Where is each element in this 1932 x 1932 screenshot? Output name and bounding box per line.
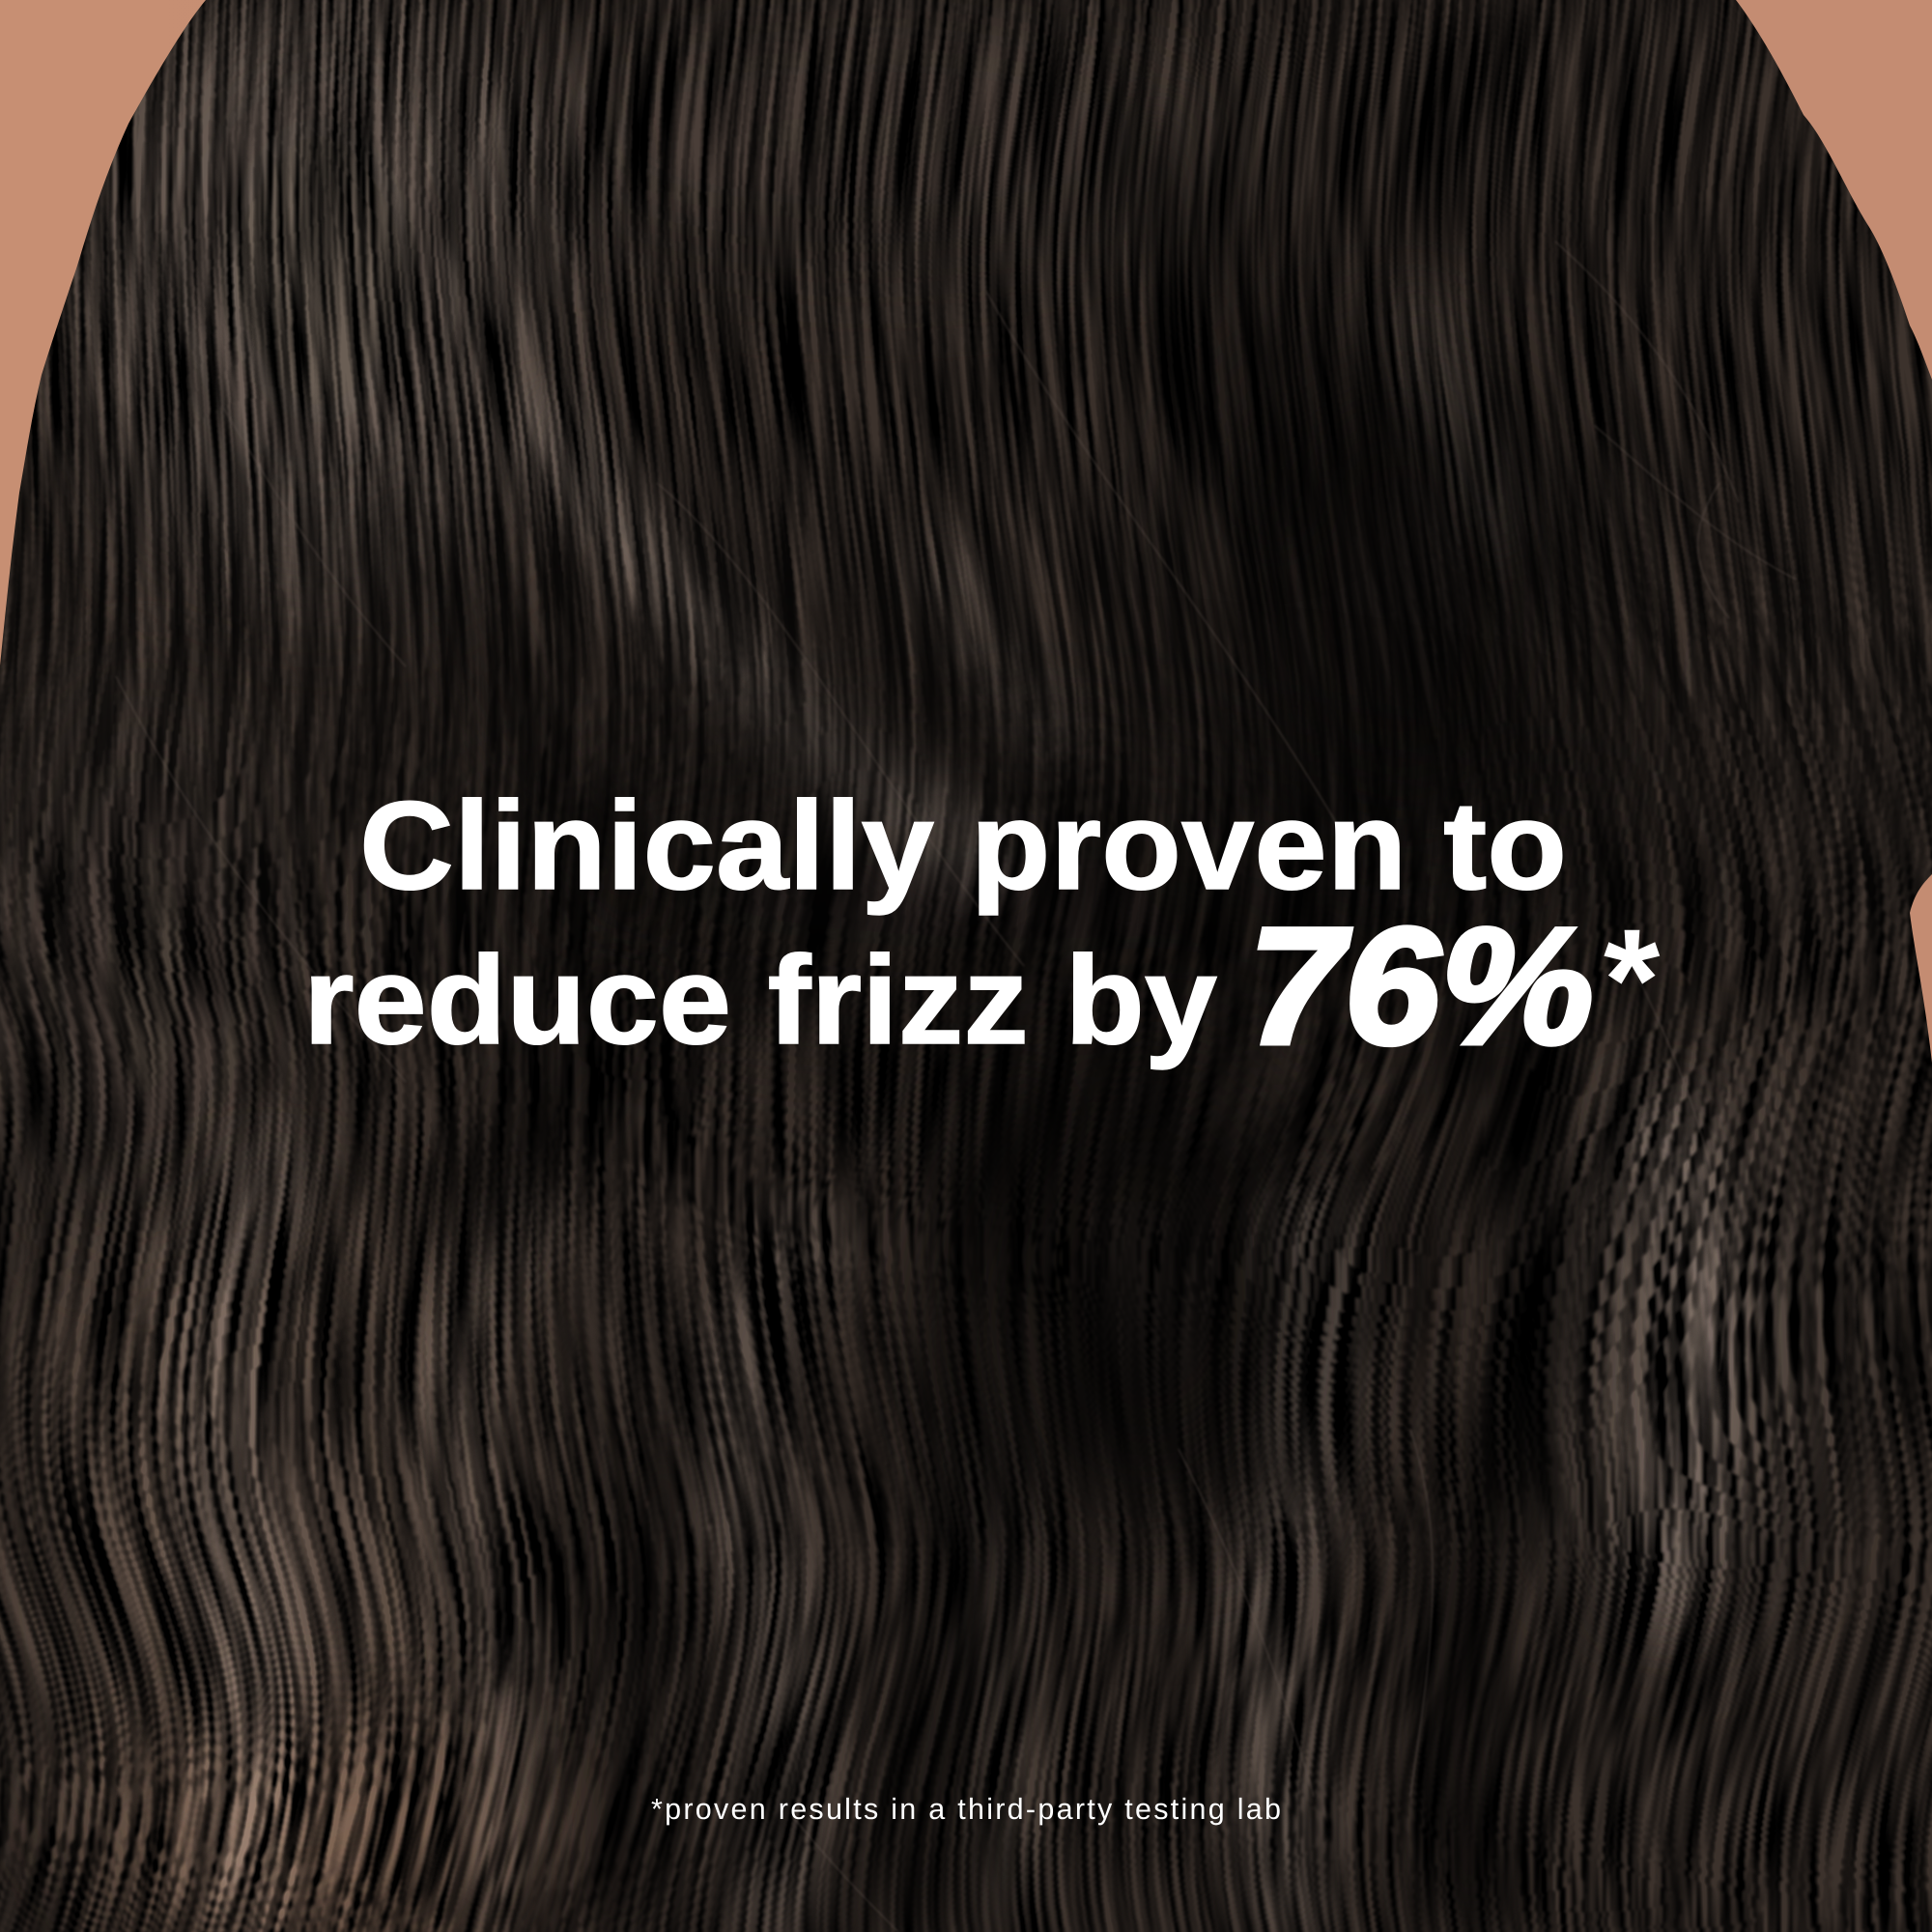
headline line 2: reduce frizz by: [303, 929, 1217, 1070]
asterisk: *: [1604, 898, 1661, 1061]
headline line 1: Clinically proven to: [359, 775, 1567, 916]
footnote: *proven results in a third-party testing lab: [651, 1793, 1281, 1826]
headline: clinically proven claim: [303, 775, 1661, 1079]
statistic: 76 percent: 76%: [1248, 894, 1594, 1079]
